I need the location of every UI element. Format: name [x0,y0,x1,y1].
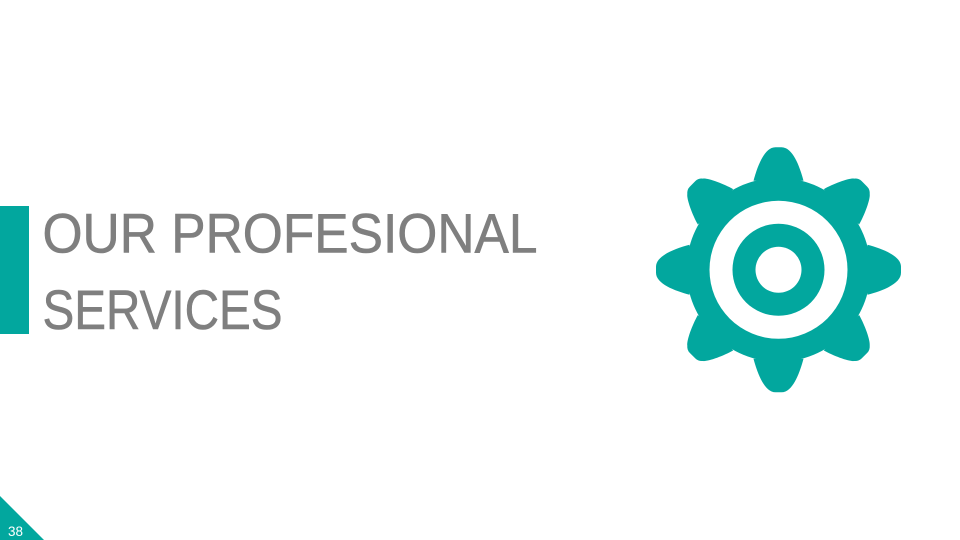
icon: gear [656,147,901,392]
title [42,202,538,341]
title: OUR PROFESIONAL [42,202,538,264]
accent bar [0,206,29,334]
page number corner: 38 [8,523,23,539]
title: SERVICES [42,278,282,341]
page number corner [0,496,44,540]
